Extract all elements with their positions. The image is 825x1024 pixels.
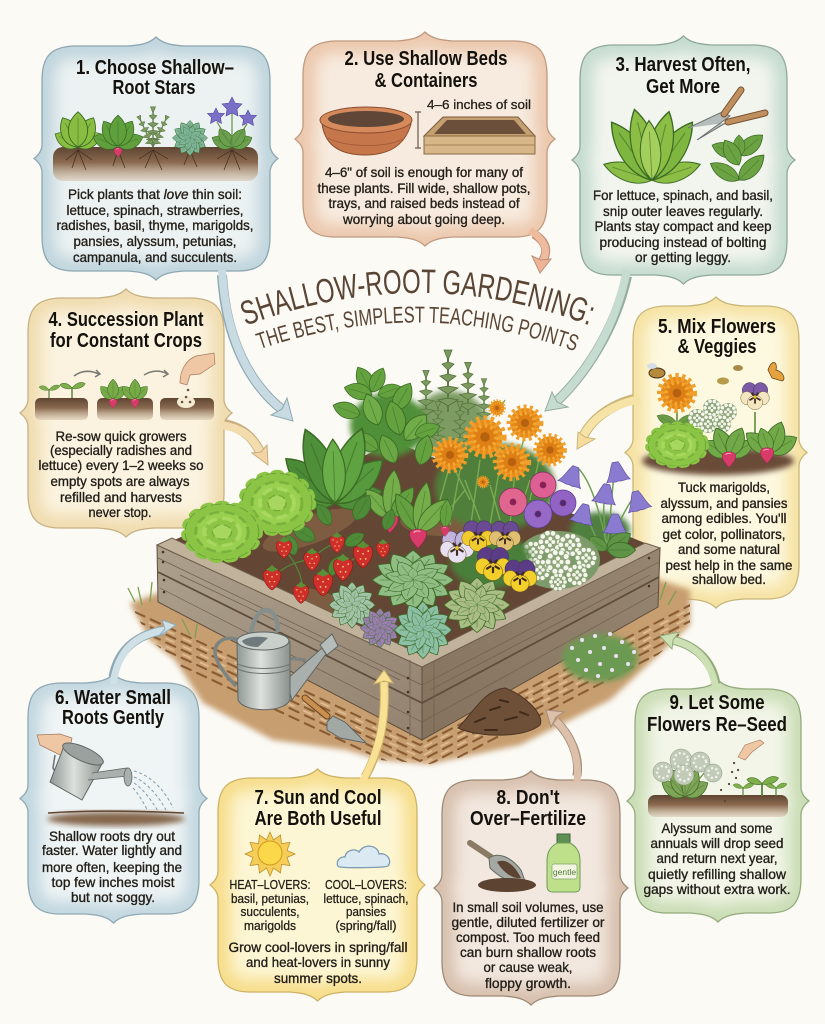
body text 3 (593, 187, 773, 265)
body text 8: floppy growth. (485, 975, 571, 991)
heat lovers list: HEAT–LOVERS: (230, 878, 310, 892)
arrow: tip 3 to bed (545, 270, 627, 411)
icon: basil sprig (707, 129, 769, 186)
panel 2: shallow beds and containers (295, 32, 555, 246)
heading 2: 2. Use Shallow Beds (344, 48, 508, 70)
soil depth label: 4–6 inches of soil (427, 98, 531, 112)
icon: succession sequence (35, 353, 215, 420)
body text 5: Tuck marigolds, (678, 479, 770, 495)
icon: garden shears (688, 90, 765, 140)
body text 6: faster. Water lightly and (42, 842, 182, 858)
body text 3: For lettuce, spinach, and basil, (593, 187, 773, 203)
panel 6: water gently (20, 674, 207, 923)
heading 8: Over–Fertilize (470, 808, 586, 830)
watering can (215, 610, 338, 710)
icon: terracotta pot (320, 107, 412, 155)
body text 2 (318, 164, 530, 227)
body text 7: summer spots. (274, 970, 362, 986)
body text 9: and return next year, (656, 850, 778, 866)
body text 5: alyssum, and pansies (660, 495, 788, 511)
arrow: tip 8 to bed (546, 710, 578, 782)
body text 4: lettuce) every 1–2 weeks so (38, 457, 204, 473)
radishes (360, 469, 454, 548)
trowel (305, 698, 366, 743)
icon: scoop of compost (470, 843, 536, 892)
panel 1: choose shallow-root stars (34, 37, 278, 280)
body text 5: shallow bed. (692, 571, 766, 587)
body text 1: pansies, alyssum, petunias, (74, 233, 236, 249)
heading 5: 5. Mix Flowers (658, 316, 776, 338)
heading 6: 6. Water Small (55, 687, 171, 709)
heat lovers list: succulents, (240, 905, 300, 919)
heading 5 (658, 316, 776, 358)
heading 7: 7. Sun and Cool (254, 787, 382, 809)
body text 7: Grow cool-lovers in spring/fall (228, 939, 408, 955)
heat lovers list: basil, petunias, (231, 892, 309, 906)
body text 1: radishes, basil, thyme, marigolds, (56, 217, 254, 233)
panel 9: let flowers re-seed (627, 680, 809, 922)
arrow: tip 1 to bed (222, 270, 293, 421)
body text 1: campanula, and succulents. (73, 249, 237, 265)
body text 9: annuals will drop seed (650, 835, 784, 851)
central illustration: raised garden bed (120, 350, 700, 777)
body text 9: quietly refilling shallow (648, 866, 787, 882)
panel 7: sun and cool (210, 769, 425, 1001)
strawberries (263, 491, 398, 604)
icon: cloud (337, 846, 390, 868)
body text 1 (56, 186, 254, 265)
body text 6: Shallow roots dry out (49, 828, 175, 844)
wooden bed frame (157, 538, 660, 740)
heading 1: 1. Choose Shallow– (76, 57, 234, 79)
body text 4: refilled and harvests (60, 489, 182, 505)
body text 1: lettuce, spinach, strawberries, (66, 202, 244, 218)
cool lovers list: lettuce, spinach, (324, 892, 408, 906)
body text 6: more often, keeping the (42, 859, 182, 875)
arrow: tip 2 to title (530, 230, 551, 273)
panel 4: succession planting (20, 289, 232, 537)
body text 2: worrying about going deep. (342, 211, 505, 227)
panel 5: mix flowers and veggies (625, 297, 807, 608)
title: THE BEST, SIMPLEST TEACHING POINTS (255, 306, 578, 350)
succulents (329, 550, 510, 659)
body text 7 (228, 939, 408, 986)
body text 3: or getting leggy. (635, 249, 731, 265)
arrow: tip 7 to bed (362, 670, 393, 782)
body text 9: gaps without extra work. (644, 881, 790, 897)
icon: gentle fertilizer bottle: gentle (553, 867, 576, 877)
icon: five shallow-rooted plants in soil (52, 97, 258, 181)
soil (172, 442, 650, 660)
compost mound (458, 688, 541, 735)
heading 3 (616, 54, 750, 98)
icon: romaine lettuce (601, 107, 703, 189)
marigolds (435, 401, 564, 487)
body text 7: and heat-lovers in sunny (246, 954, 390, 970)
icon: gentle fertilizer bottle (547, 834, 580, 892)
petunias (499, 472, 576, 528)
body text 5 (660, 479, 793, 587)
body text 9: Alyssum and some (662, 820, 773, 836)
heat lovers list (230, 878, 310, 933)
arrow: tip 9 to bed (660, 632, 716, 690)
body text 2: 4–6" of soil is enough for many of (325, 164, 523, 180)
body text 4: empty spots are always (50, 473, 190, 489)
icon: mixed flower and vegetable bed (642, 362, 801, 475)
heading 1: Root Stars (112, 77, 196, 99)
body text 3: Plants stay compact and keep (594, 218, 772, 234)
heading 7: Are Both Useful (254, 808, 382, 830)
heading 7 (254, 787, 382, 830)
body text 3: snip outer leaves regularly. (603, 203, 763, 219)
heading 4: 4. Succession Plant (48, 309, 204, 331)
body text 8: gentle, diluted fertilizer or (452, 914, 605, 930)
body text 2: trays, and raised beds instead of (328, 195, 520, 211)
heading 3: 3. Harvest Often, (616, 54, 750, 76)
icon: sun (245, 832, 295, 876)
heading 1 (76, 57, 234, 99)
body text 6: top few inches moist (52, 874, 175, 890)
heading 6: Roots Gently (62, 707, 165, 729)
arrow: tip 5 to bed (577, 399, 640, 449)
panel 8: don't over-fertilize (434, 771, 628, 1005)
heading 8: 8. Don't (496, 787, 560, 809)
basil (330, 363, 442, 467)
thyme (412, 350, 491, 459)
body text 6: but not soggy. (71, 889, 155, 905)
icon: alyssum dropping seed (648, 740, 788, 817)
wood-chip mulch (128, 576, 694, 768)
body text 9 (644, 820, 790, 897)
heading 5: & Veggies (678, 336, 756, 358)
heading 9: 9. Let Some (670, 692, 764, 714)
marigold foliage (435, 400, 555, 531)
body text 4: (especially radishes and (50, 442, 192, 458)
spinach (277, 424, 391, 514)
body text 4: Re-sow quick growers (56, 428, 186, 444)
heading 8 (470, 787, 586, 830)
lettuces (185, 473, 312, 560)
body text 2: these plants. Fill wide, shallow pots, (318, 180, 530, 196)
heading 6 (55, 687, 171, 729)
heading 9 (647, 692, 787, 736)
body text 8: compost. Too much feed (456, 929, 600, 945)
icon: soil depth bracket and wooden tray (415, 112, 535, 154)
panel 3: harvest often (572, 36, 795, 284)
heading 2 (344, 48, 508, 92)
heading 9: Flowers Re–Seed (647, 714, 787, 736)
heading 4 (48, 309, 204, 352)
arrow: tip 4 to bed (220, 424, 268, 465)
body text 4: never stop. (88, 504, 152, 520)
heading 4: for Constant Crops (50, 330, 202, 352)
body text 8 (452, 899, 605, 991)
body text 8: In small soil volumes, use (452, 899, 604, 915)
cool lovers list: pansies (346, 905, 386, 919)
body text 5: get color, pollinators, (662, 526, 786, 542)
body text 5: among edibles. You'll (662, 510, 786, 526)
body text 1: Pick plants that love thin soil: (68, 186, 242, 202)
arrow: tip 6 to bed (113, 620, 176, 684)
cool lovers list: COOL–LOVERS: (325, 878, 407, 892)
icon: hand watering the soil (37, 734, 185, 826)
body text 4 (38, 428, 204, 520)
body text 6 (42, 828, 182, 905)
body text 8: can burn shallow roots (460, 944, 596, 960)
body text 8: or cause weak, (484, 959, 572, 975)
body text 5: pest help in the same (666, 557, 793, 573)
heading 2: & Containers (374, 70, 478, 92)
heading 3: Get More (646, 76, 720, 98)
alyssum (516, 530, 600, 591)
low flowering groundcover (562, 634, 638, 682)
body text 3: producing instead of bolting (600, 234, 766, 250)
campanula (558, 460, 652, 558)
body text 5: and some natural (678, 541, 780, 557)
pansies (440, 521, 537, 592)
cool lovers list (324, 878, 408, 933)
title: SHALLOW-ROOT GARDENING: (240, 269, 594, 325)
heat lovers list: marigolds (244, 919, 296, 933)
cool lovers list: (spring/fall) (336, 919, 396, 933)
